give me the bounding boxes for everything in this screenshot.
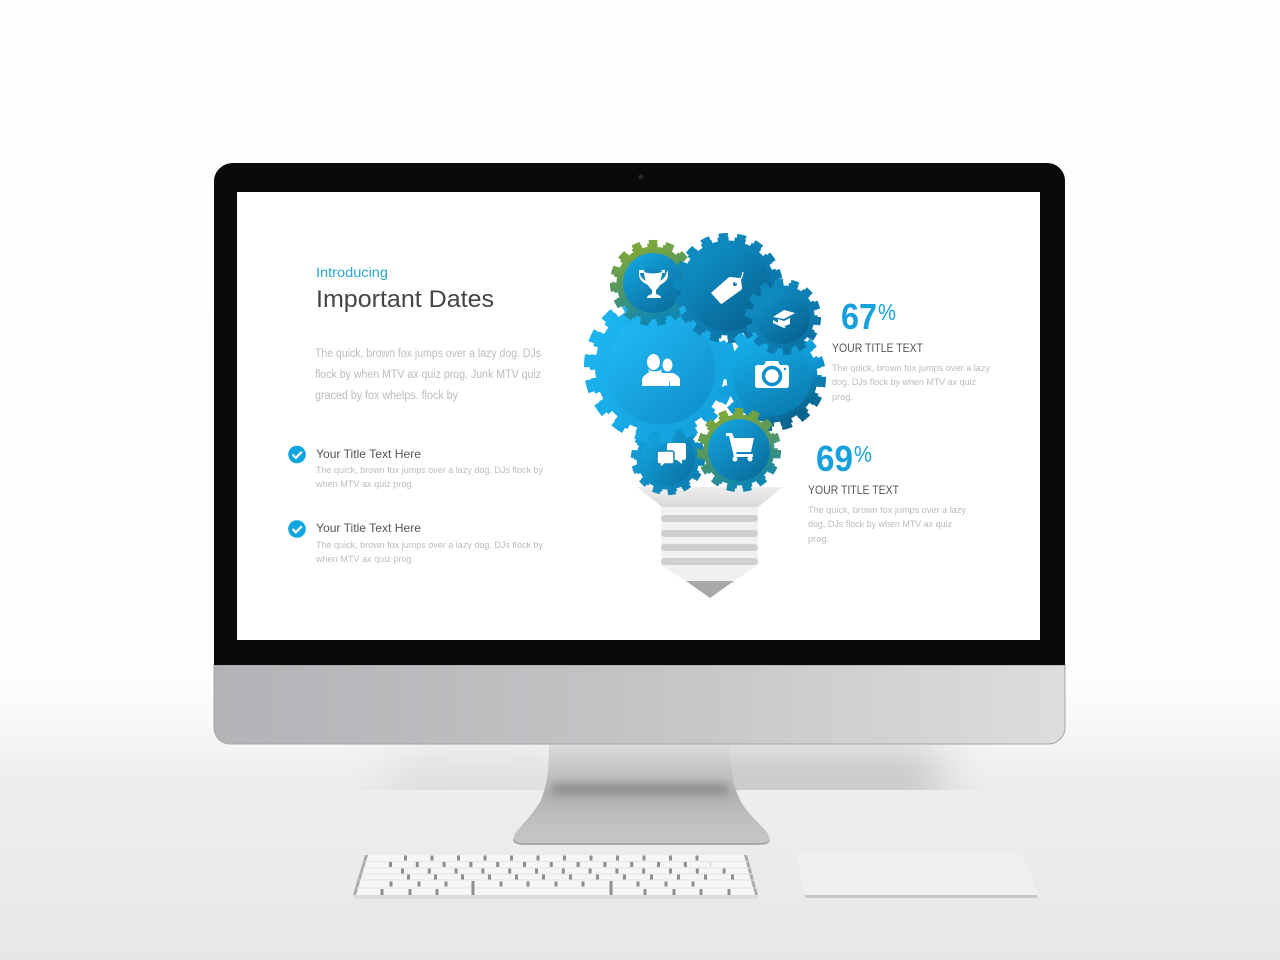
icon: chat bubbles — [657, 443, 686, 468]
gear: graduation — [747, 281, 819, 353]
list item 1: when MTV ax quiz prog. — [315, 479, 414, 490]
stat: 67%: The quick, brown fox jumps over a lazy — [832, 363, 990, 374]
icon: graduation cap — [773, 310, 795, 328]
icon: camera — [755, 361, 789, 388]
list item 1: The quick, brown fox jumps over a lazy dog. DJs flock by — [316, 465, 543, 476]
icon: shopping cart — [726, 433, 754, 462]
list item 2: when MTV ax quiz prog. — [315, 554, 414, 565]
list item 2: The quick, brown fox jumps over a lazy dog. DJs flock by — [316, 540, 543, 551]
stat: 69%: YOUR TITLE TEXT — [808, 483, 900, 497]
trackpad — [797, 852, 1037, 898]
list item 1: Your Title Text Here — [316, 447, 421, 461]
stat: 67%: % — [878, 299, 896, 325]
gear: people (large) — [587, 294, 733, 440]
stat: 67% — [832, 296, 990, 403]
monitor bezel — [214, 163, 1065, 665]
icon: check — [288, 446, 306, 463]
list item 2: Your Title Text Here — [316, 521, 421, 535]
stat: 67%: prog. — [832, 392, 853, 403]
keyboard — [353, 855, 758, 899]
gear: tag — [675, 235, 781, 341]
webcam — [638, 174, 644, 180]
intro paragraph: flock by when MTV ax quiz prog. Junk MTV quiz — [315, 369, 541, 381]
gear: cart — [699, 410, 779, 490]
gear: chat — [632, 422, 704, 494]
monitor stand — [513, 744, 770, 845]
gear cluster — [587, 235, 824, 494]
stat: 69%: prog. — [808, 534, 829, 545]
intro paragraph: The quick, brown fox jumps over a lazy dog. DJs — [315, 348, 541, 360]
monitor chin — [214, 665, 1065, 744]
screen — [237, 192, 1040, 640]
stat: 67%: 67 — [841, 296, 877, 337]
icon: check — [288, 520, 306, 538]
intro paragraph: graced by fox whelps. flock by — [315, 390, 458, 402]
icon: trophy — [639, 268, 668, 298]
left heading: Important Dates — [316, 286, 494, 313]
stat: 69%: The quick, brown fox jumps over a lazy — [808, 505, 966, 516]
stat: 69% — [808, 438, 966, 545]
left heading: Introducing — [316, 265, 388, 280]
stat: 67%: YOUR TITLE TEXT — [832, 341, 924, 355]
background: wall and desk — [0, 727, 1280, 960]
stat: 69%: 69 — [816, 438, 853, 479]
icon: tag — [711, 272, 743, 304]
gear: camera — [720, 325, 824, 429]
icon: people — [642, 354, 680, 386]
stat: 69%: % — [854, 441, 872, 467]
gear: trophy — [612, 242, 694, 324]
left heading — [316, 265, 494, 313]
stat: 69%: dog. DJs flock by when MTV ax quiz — [808, 519, 952, 530]
intro paragraph — [315, 348, 541, 402]
list item 1 — [288, 446, 543, 490]
stat: 67%: dog. DJs flock by when MTV ax quiz — [832, 377, 976, 388]
list item 2 — [288, 520, 543, 565]
light bulb base — [637, 487, 783, 598]
monitor body — [214, 163, 1065, 744]
